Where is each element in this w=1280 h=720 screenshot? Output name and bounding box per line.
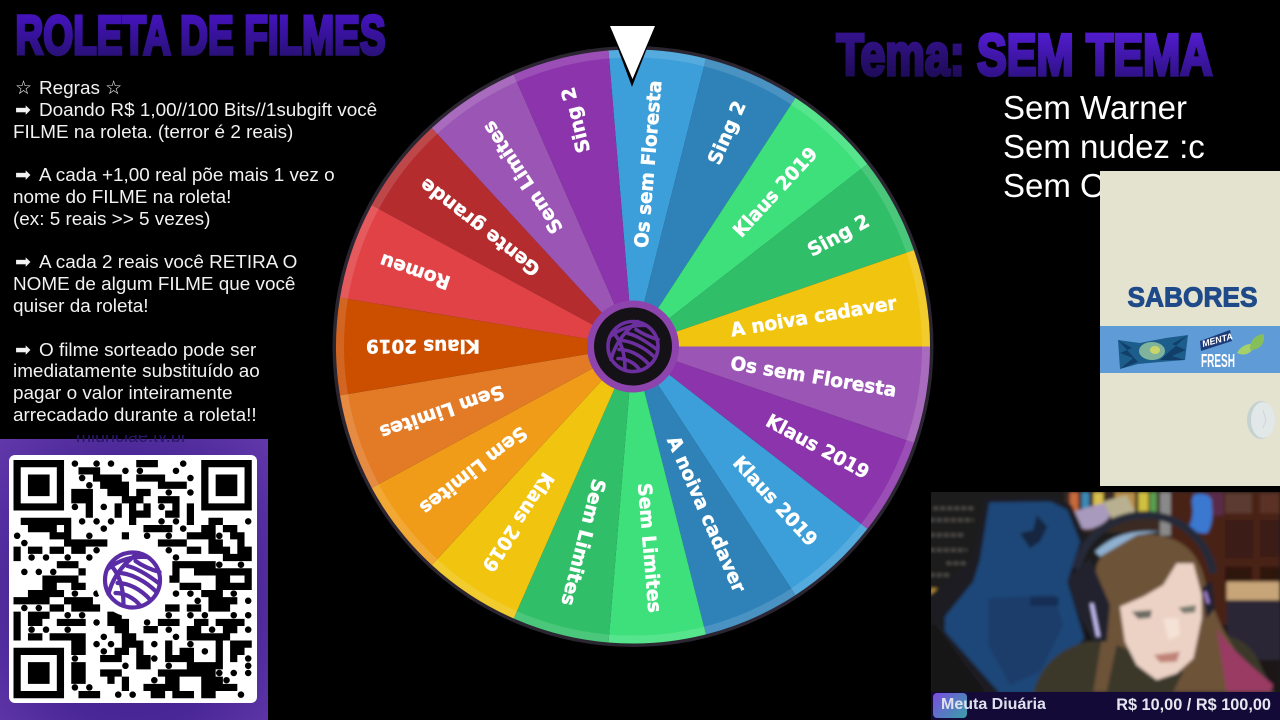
segment: A noiva cadaver: A noiva cadaver bbox=[662, 433, 750, 596]
logo: menta fresh bbox=[1200, 330, 1264, 371]
segment: A noiva cadaver bbox=[625, 249, 934, 395]
text block: regras: ➡ bbox=[15, 340, 31, 361]
segment: A noiva cadaver bbox=[588, 327, 797, 638]
segment: Sing 2: Sing 2 bbox=[557, 85, 595, 155]
meta diária bar bbox=[931, 692, 1280, 720]
segment: Sing 2 bbox=[588, 55, 797, 366]
segment: Gente grande: Gente grande bbox=[416, 173, 545, 280]
segment: Os sem Floresta: Os sem Floresta bbox=[729, 352, 898, 402]
segment: Sem Limites bbox=[336, 300, 649, 489]
text block: regras: arrecadado durante a roleta!! bbox=[13, 405, 257, 426]
segment: Gente grande bbox=[369, 126, 663, 385]
text block: regras: O filme sorteado pode ser bbox=[39, 340, 256, 361]
segment: Klaus 2019 bbox=[610, 304, 917, 531]
text block: regras: NOME de algum FILME que você bbox=[13, 274, 295, 295]
icon: pastilha branca bbox=[1247, 401, 1275, 439]
segment: Klaus 2019: Klaus 2019 bbox=[477, 468, 558, 576]
segment: Romeu bbox=[336, 204, 649, 393]
segment: Sing 2 bbox=[610, 162, 917, 389]
text block: regras: imediatamente substituído ao bbox=[13, 361, 260, 382]
logo: menta fresh: MENTA bbox=[1201, 331, 1234, 349]
text block: regras: Doando R$ 1,00//100 Bits//1subgift você bbox=[39, 100, 377, 121]
panel: qr code bbox=[0, 439, 268, 720]
segment: Klaus 2019: Klaus 2019 bbox=[728, 452, 822, 551]
text block: regras: pagar o valor inteiramente bbox=[13, 383, 232, 404]
wheel bbox=[332, 46, 934, 647]
segment: Sing 2 bbox=[513, 47, 680, 358]
text block: regras: ➡ bbox=[15, 252, 31, 273]
text block: regras: A cada +1,00 real põe mais 1 vez o bbox=[39, 165, 335, 186]
icon: embalagem da bala bbox=[1118, 335, 1188, 369]
heading: sabores: SABORES bbox=[1128, 282, 1258, 312]
text block: regras: nome do FILME na roleta! bbox=[13, 187, 231, 208]
text block: regras: Regras ☆ bbox=[39, 78, 122, 99]
segment: Klaus 2019: Klaus 2019 bbox=[366, 335, 480, 357]
text block: regras: ☆ bbox=[15, 78, 32, 99]
text block: regras: ➡ bbox=[15, 165, 31, 186]
text block: regras: quiser da roleta! bbox=[13, 296, 148, 317]
segment: Os sem Floresta bbox=[625, 298, 934, 444]
segment: Klaus 2019 bbox=[430, 320, 674, 622]
text block: regras: A cada 2 reais você RETIRA O bbox=[39, 252, 297, 273]
pointer arrow bbox=[610, 26, 655, 87]
text block: sem warner list: Sem nudez :c bbox=[1003, 128, 1205, 165]
segment: Romeu: Romeu bbox=[377, 249, 453, 293]
segment: Sem Limites: Sem Limites bbox=[478, 117, 568, 238]
text block: regras: FILME na roleta. (terror é 2 reais) bbox=[13, 122, 293, 143]
qr card bbox=[9, 455, 257, 703]
text block: sem warner list bbox=[1003, 89, 1205, 204]
segment: Sem Limites bbox=[369, 308, 663, 567]
segment: Klaus 2019 bbox=[336, 298, 633, 395]
segment: Os sem Floresta bbox=[584, 46, 706, 351]
segment: Sem Limites bbox=[513, 335, 680, 646]
segment: Sem Limites: Sem Limites bbox=[633, 482, 666, 614]
segment: A noiva cadaver: A noiva cadaver bbox=[729, 292, 899, 342]
segment: Klaus 2019: Klaus 2019 bbox=[729, 143, 822, 242]
segment: Klaus 2019: Klaus 2019 bbox=[762, 410, 873, 484]
segment: Sem Limites bbox=[430, 71, 674, 373]
webcam bbox=[931, 492, 1280, 720]
segment: Sing 2: Sing 2 bbox=[704, 98, 751, 168]
text block: sem warner list: Sem O bbox=[1003, 167, 1106, 204]
panel: anúncio sabores bbox=[1100, 171, 1280, 486]
segment: Klaus 2019 bbox=[597, 95, 870, 380]
text block: regras bbox=[13, 78, 377, 426]
text block: regras: (ex: 5 reais >> 5 vezes) bbox=[13, 209, 210, 230]
progress fill bbox=[933, 693, 967, 718]
segment: Sem Limites: Sem Limites bbox=[556, 476, 610, 608]
bar amount: R$ 10,00 / R$ 100,00 bbox=[1116, 696, 1271, 714]
faixa: bala e menta fresh bbox=[1100, 326, 1280, 373]
segment: Sem Limites bbox=[584, 342, 706, 647]
segment: Os sem Floresta: Os sem Floresta bbox=[631, 80, 667, 249]
wheel hub bbox=[587, 300, 679, 392]
segment: Sing 2: Sing 2 bbox=[804, 210, 873, 261]
segment: Sem Limites: Sem Limites bbox=[377, 380, 507, 443]
bar label: Meuta Diuária bbox=[941, 696, 1046, 713]
text block: regras: ➡ bbox=[15, 100, 31, 121]
logo: menta fresh: FRESH bbox=[1201, 351, 1235, 371]
text block: sem warner list: Sem Warner bbox=[1003, 89, 1187, 126]
segment: Klaus 2019 bbox=[597, 313, 870, 598]
segment: Sem Limites: Sem Limites bbox=[415, 422, 531, 519]
